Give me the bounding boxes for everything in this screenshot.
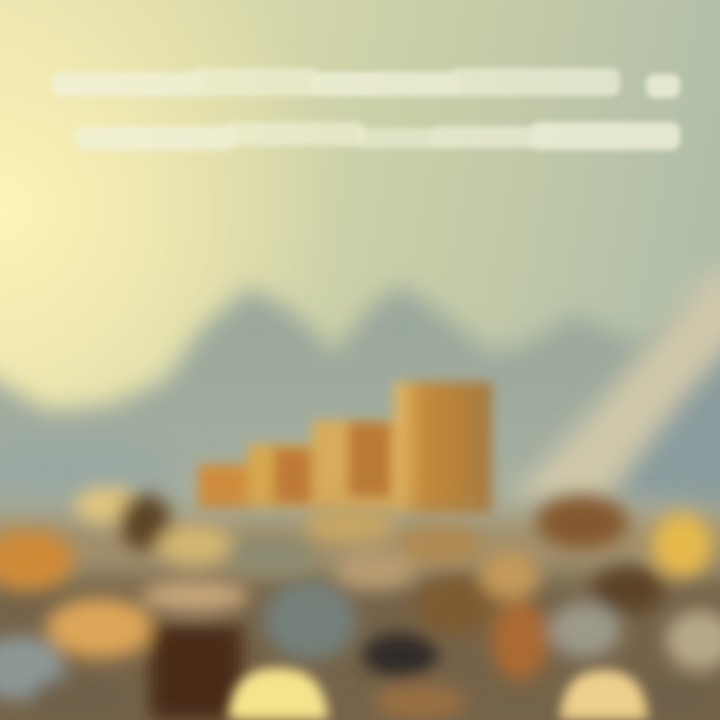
chart: rising gold coin stacks	[198, 382, 492, 514]
mountains	[0, 260, 720, 580]
title: blurred headline bars	[52, 68, 680, 150]
foreground: base of coin pile	[0, 520, 720, 720]
right ridge	[510, 270, 720, 510]
foreground: scattered coins	[0, 487, 720, 720]
bright bokeh coins	[228, 668, 648, 720]
haze at mountain base left	[0, 435, 180, 505]
